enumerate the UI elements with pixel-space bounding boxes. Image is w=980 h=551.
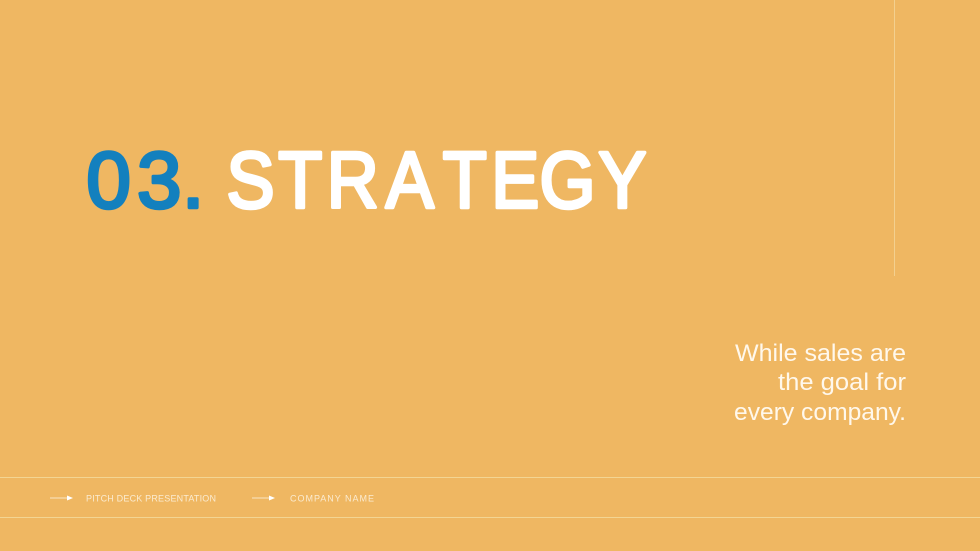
tagline text block: While sales are xyxy=(735,340,906,367)
footer text: COMPANY NAME xyxy=(290,494,374,504)
icon: arrow xyxy=(252,496,275,500)
title word: STRATEGY xyxy=(227,136,646,225)
title number: 03. xyxy=(86,136,204,224)
title xyxy=(86,136,646,225)
footer text: PITCH DECK PRESENTATION xyxy=(86,494,216,504)
footer label: pitch deck presentation xyxy=(50,494,216,504)
footer label: company name xyxy=(252,494,374,504)
tagline text block: every company. xyxy=(734,399,906,426)
tagline text block: the goal for xyxy=(778,369,906,396)
tagline text block xyxy=(734,340,906,426)
icon: arrow xyxy=(50,496,73,500)
